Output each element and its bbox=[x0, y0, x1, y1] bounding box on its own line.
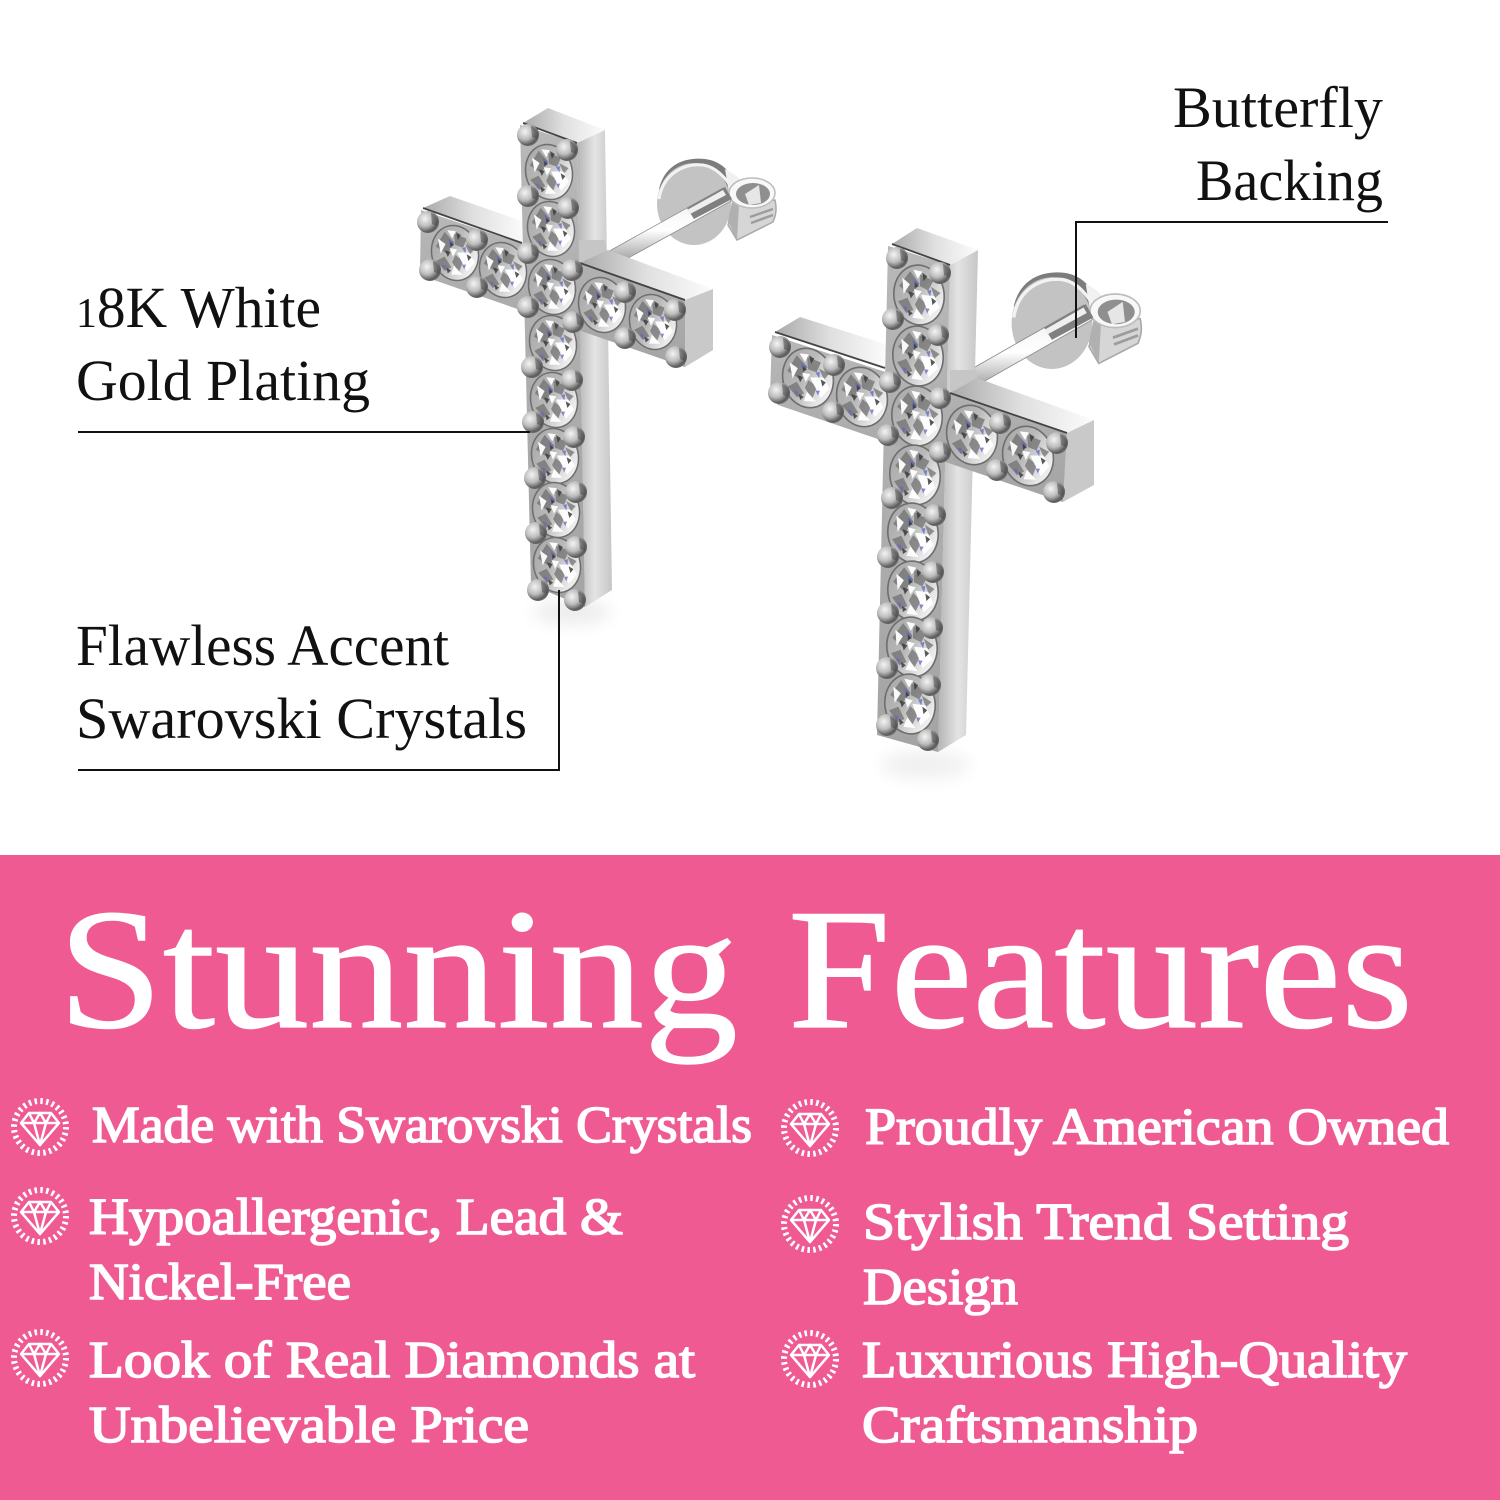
feature: craftsmanship bbox=[784, 1332, 1407, 1454]
feature: look of real diamonds: Unbelievable Price bbox=[89, 1397, 529, 1454]
cross body left bbox=[420, 108, 713, 607]
feature: hypoallergenic: Nickel-Free bbox=[89, 1254, 351, 1311]
callout: butterfly backing: Butterfly bbox=[1173, 75, 1383, 140]
feature: stylish design bbox=[784, 1194, 1349, 1316]
feature: swarovski crystals: Made with Swarovski Crystals bbox=[92, 1097, 752, 1154]
callout: butterfly backing bbox=[1076, 75, 1388, 338]
callout: swarovski crystals: Flawless Accent bbox=[76, 613, 449, 678]
callout: white gold plating bbox=[76, 275, 530, 432]
heading: Features bbox=[788, 875, 1413, 1065]
earring reflection bbox=[881, 751, 969, 779]
earring reflection bbox=[534, 600, 610, 624]
feature: stylish design: Stylish Trend Setting bbox=[863, 1194, 1349, 1251]
prongs left bbox=[417, 124, 687, 611]
right earring bbox=[768, 228, 1141, 779]
feature: craftsmanship: Luxurious High-Quality bbox=[862, 1332, 1407, 1389]
callout: swarovski crystals bbox=[76, 590, 559, 770]
crystals left bbox=[425, 139, 683, 598]
butterfly backing left bbox=[595, 159, 776, 272]
butterfly backing right bbox=[944, 272, 1141, 399]
left earring bbox=[417, 108, 776, 624]
panel: stunning features bbox=[0, 855, 1500, 1500]
feature: american owned: Proudly American Owned bbox=[865, 1099, 1449, 1156]
feature: stylish design: Design bbox=[863, 1259, 1018, 1316]
cross body right bbox=[770, 228, 1094, 752]
callout: white gold plating: 18K White bbox=[76, 275, 321, 340]
feature: look of real diamonds: Look of Real Diamonds at bbox=[89, 1332, 696, 1389]
feature: hypoallergenic bbox=[14, 1189, 623, 1311]
feature: look of real diamonds bbox=[14, 1332, 696, 1454]
feature: craftsmanship: Craftsmanship bbox=[862, 1397, 1198, 1454]
callout: swarovski crystals: Swarovski Crystals bbox=[76, 686, 527, 751]
crystals right bbox=[775, 261, 1061, 738]
heading: Stunning bbox=[58, 875, 738, 1065]
callout: butterfly backing: Backing bbox=[1196, 148, 1383, 213]
feature: hypoallergenic: Hypoallergenic, Lead & bbox=[89, 1189, 623, 1246]
prongs right bbox=[768, 247, 1068, 751]
callout: white gold plating: Gold Plating bbox=[76, 348, 370, 413]
